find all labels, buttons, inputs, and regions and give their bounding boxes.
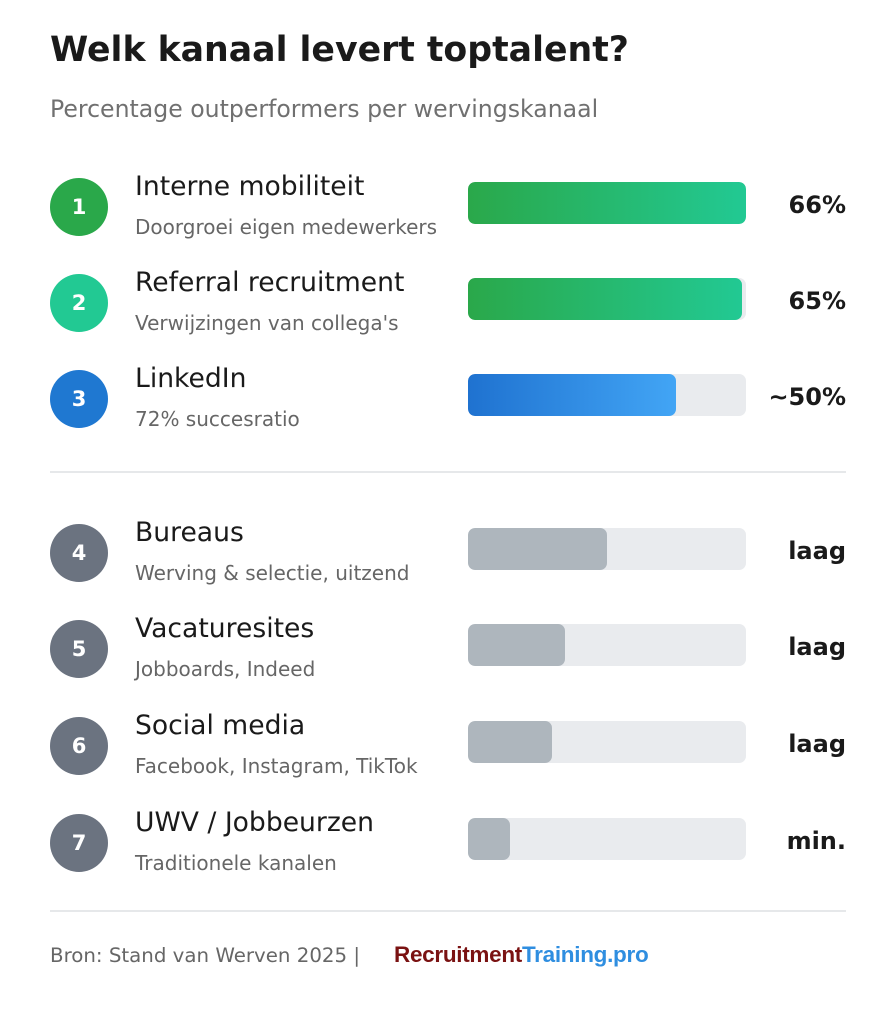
- row 5: [50, 613, 846, 681]
- row 4: Werving & selectie, uitzend: [135, 561, 409, 585]
- row 7: min.: [787, 827, 846, 855]
- row 1: 66%: [789, 191, 846, 219]
- row 4: laag: [788, 537, 846, 565]
- row 6: 6: [72, 734, 86, 758]
- row 4: Bureaus: [135, 517, 244, 548]
- row 6: Social media: [135, 710, 305, 741]
- footer source: Bron: Stand van Werven 2025 |: [50, 944, 360, 967]
- row 1: Interne mobiliteit: [135, 171, 364, 202]
- row 1: 1: [72, 195, 86, 219]
- row 2: 2: [72, 291, 86, 315]
- row 2: Referral recruitment: [135, 267, 404, 298]
- row 7: Traditionele kanalen: [135, 851, 337, 875]
- row 5: laag: [788, 633, 846, 661]
- row 3: [50, 363, 846, 431]
- row 7: [50, 807, 846, 875]
- row 7: 7: [72, 831, 86, 855]
- row 5: 5: [72, 637, 86, 661]
- row 6: laag: [788, 730, 846, 758]
- title: Welk kanaal levert toptalent?: [50, 30, 629, 70]
- row 1: Doorgroei eigen medewerkers: [135, 215, 437, 239]
- row 4: 4: [72, 541, 86, 565]
- row 4: [50, 517, 846, 585]
- row 3: 72% succesratio: [135, 407, 300, 431]
- row 2: Verwijzingen van collega's: [135, 311, 399, 335]
- row 3: 3: [72, 387, 86, 411]
- row 5: Jobboards, Indeed: [135, 657, 315, 681]
- row 6: Facebook, Instagram, TikTok: [135, 754, 418, 778]
- row 3: LinkedIn: [135, 363, 246, 394]
- row 6: [50, 710, 846, 778]
- subtitle: Percentage outperformers per wervingskanaal: [50, 95, 598, 123]
- row 1: [50, 171, 846, 239]
- row 7: UWV / Jobbeurzen: [135, 807, 374, 838]
- row 2: 65%: [789, 287, 846, 315]
- row 2: [50, 267, 846, 335]
- row 3: ~50%: [768, 383, 846, 411]
- row 5: Vacaturesites: [135, 613, 314, 644]
- logo: RecruitmentTraining.pro: [394, 942, 648, 967]
